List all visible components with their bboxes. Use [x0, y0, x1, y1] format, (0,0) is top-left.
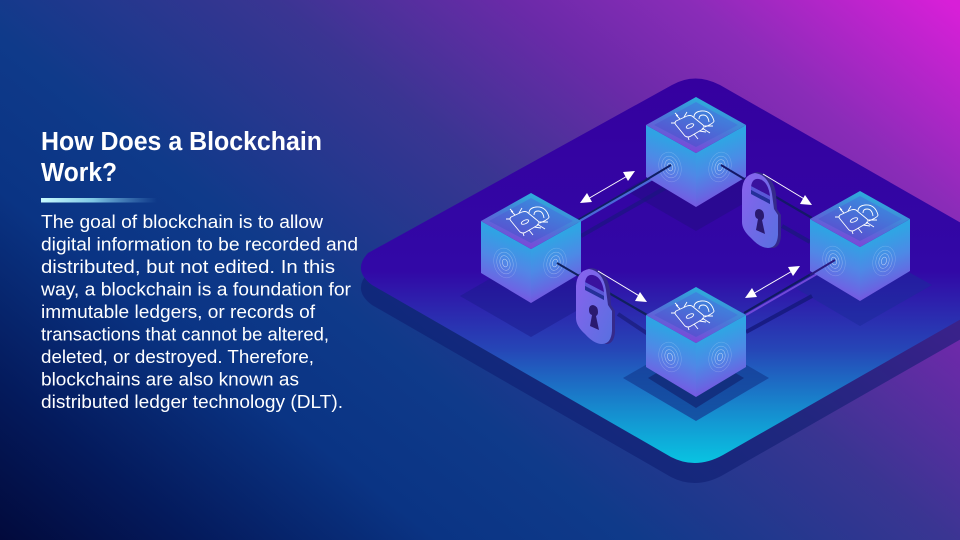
body text: way, a blockchain is a foundation for	[40, 280, 351, 300]
body text: digital information to be recorded and	[41, 234, 358, 254]
title underline	[41, 198, 157, 202]
lock: upper right	[742, 172, 781, 248]
body text: The goal of blockchain is to allow	[41, 212, 324, 232]
connector: left cube to bottom cube	[557, 263, 648, 334]
body text	[40, 212, 358, 412]
body text: deleted, or destroyed. Therefore,	[41, 347, 314, 367]
lock: lower left	[576, 268, 615, 344]
body text: immutable ledgers, or records of	[41, 302, 316, 322]
title: How Does a Blockchain	[41, 128, 322, 156]
connector stubs on cube faces	[557, 165, 835, 277]
title: Work?	[41, 159, 117, 187]
cube: top	[646, 97, 746, 207]
cube: left	[481, 193, 581, 303]
body text: distributed ledger technology (DLT).	[41, 392, 343, 412]
title	[41, 128, 322, 187]
isometric platform	[361, 78, 960, 463]
cube: bottom	[646, 287, 746, 397]
body text: blockchains are also known as	[41, 370, 299, 390]
arrow: left cube to bottom cube	[598, 271, 647, 302]
body text: distributed, but not edited. In this	[41, 257, 335, 277]
connector: top cube to right cube	[721, 165, 812, 242]
platform shadow band	[361, 98, 960, 483]
arrow: right cube to bottom cube	[745, 266, 800, 298]
arrow: top cube to right cube	[763, 174, 812, 205]
cube shadows	[460, 150, 932, 421]
body text: transactions that cannot be altered,	[41, 324, 329, 344]
cube: right	[810, 191, 910, 301]
connector: right cube to bottom cube	[744, 260, 836, 332]
connector: left cube to top cube	[578, 166, 672, 236]
arrow: left cube to top cube	[580, 171, 635, 203]
